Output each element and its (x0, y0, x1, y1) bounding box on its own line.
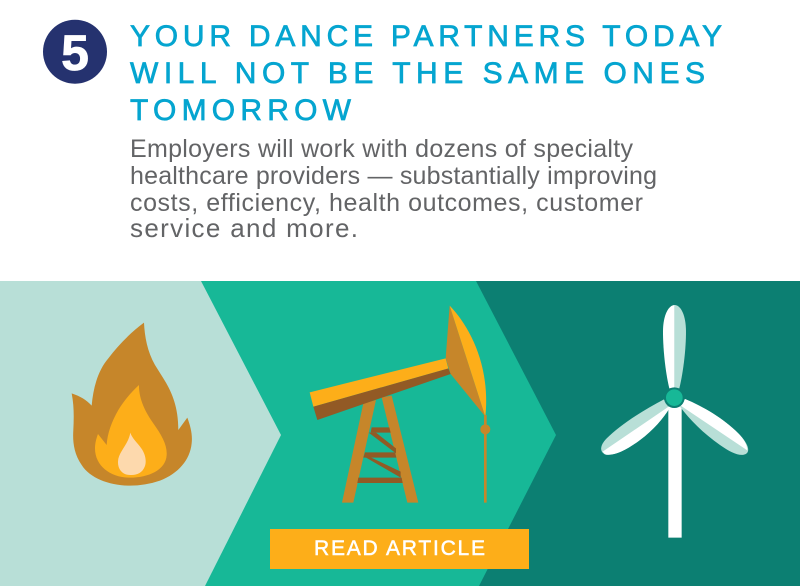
body text: Employers will work with dozens of specialty (130, 135, 634, 163)
blade: left (601, 399, 669, 455)
number badge: 5 (61, 25, 89, 81)
title (130, 20, 722, 127)
pump legs (342, 396, 418, 503)
title: TOMORROW (130, 94, 352, 127)
title: YOUR DANCE PARTNERS TODAY (130, 20, 722, 53)
pump rod (480, 415, 490, 503)
icon: wind turbine (601, 305, 748, 538)
read article button: READ ARTICLE (314, 537, 485, 560)
pump cross braces (357, 427, 403, 483)
panel: chevron band (0, 281, 800, 586)
turbine hub (665, 388, 684, 407)
icon: flame (72, 323, 192, 486)
number badge (43, 20, 107, 84)
body text: healthcare providers — substantially improving (130, 162, 657, 190)
pump beam (310, 358, 451, 420)
body text: costs, efficiency, health outcomes, customer (130, 189, 643, 217)
turbine tower (668, 405, 682, 538)
blade: right (680, 399, 748, 455)
body text: service and more. (130, 213, 358, 243)
pump head (446, 306, 486, 417)
icon: oil pump (310, 306, 490, 503)
title: WILL NOT BE THE SAME ONES (130, 57, 705, 90)
body text (130, 135, 657, 243)
blade: top (663, 305, 686, 388)
read article button (270, 529, 529, 569)
